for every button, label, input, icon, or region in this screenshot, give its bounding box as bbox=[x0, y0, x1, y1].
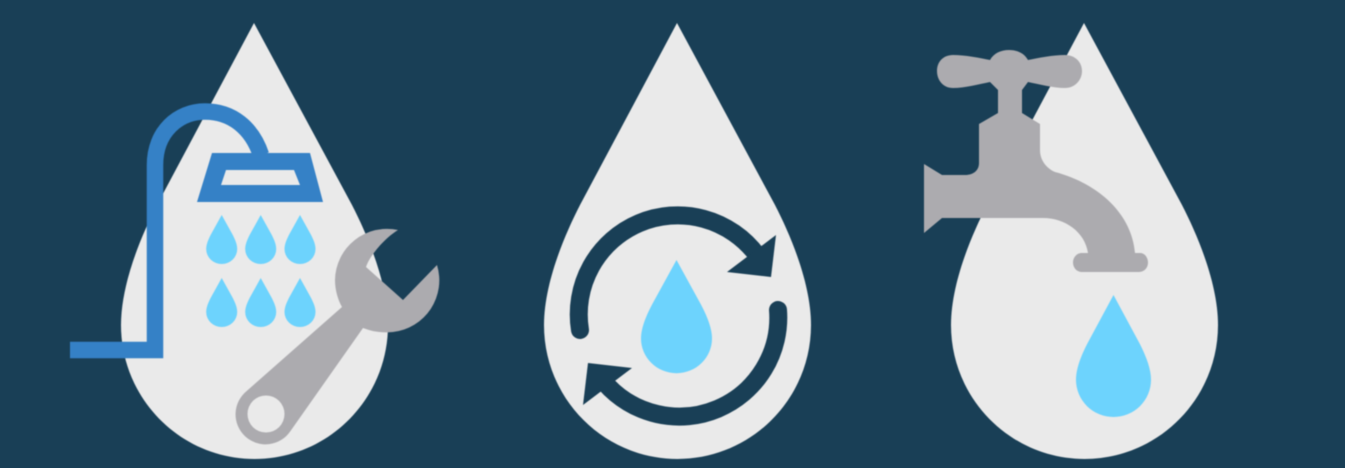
icon: large drop left bbox=[121, 23, 388, 459]
panel: shower repair bbox=[70, 23, 439, 459]
icon: shower pipe bbox=[70, 112, 261, 350]
icon: shower head bbox=[197, 153, 323, 202]
icon: falling water drop bbox=[1076, 295, 1151, 417]
icon: shower water drops bbox=[206, 215, 316, 327]
icon: wrench bbox=[236, 229, 439, 444]
icon: large drop centre bbox=[544, 23, 811, 459]
icon: recycling arrow bottom bbox=[583, 310, 778, 417]
panel: water recycling bbox=[544, 23, 811, 459]
panel: tap bbox=[924, 23, 1218, 459]
icon: large drop right bbox=[951, 23, 1218, 459]
icon: centre water drop bbox=[641, 260, 712, 373]
icon: faucet bbox=[924, 50, 1148, 272]
icon: recycling arrow top bbox=[579, 215, 776, 330]
